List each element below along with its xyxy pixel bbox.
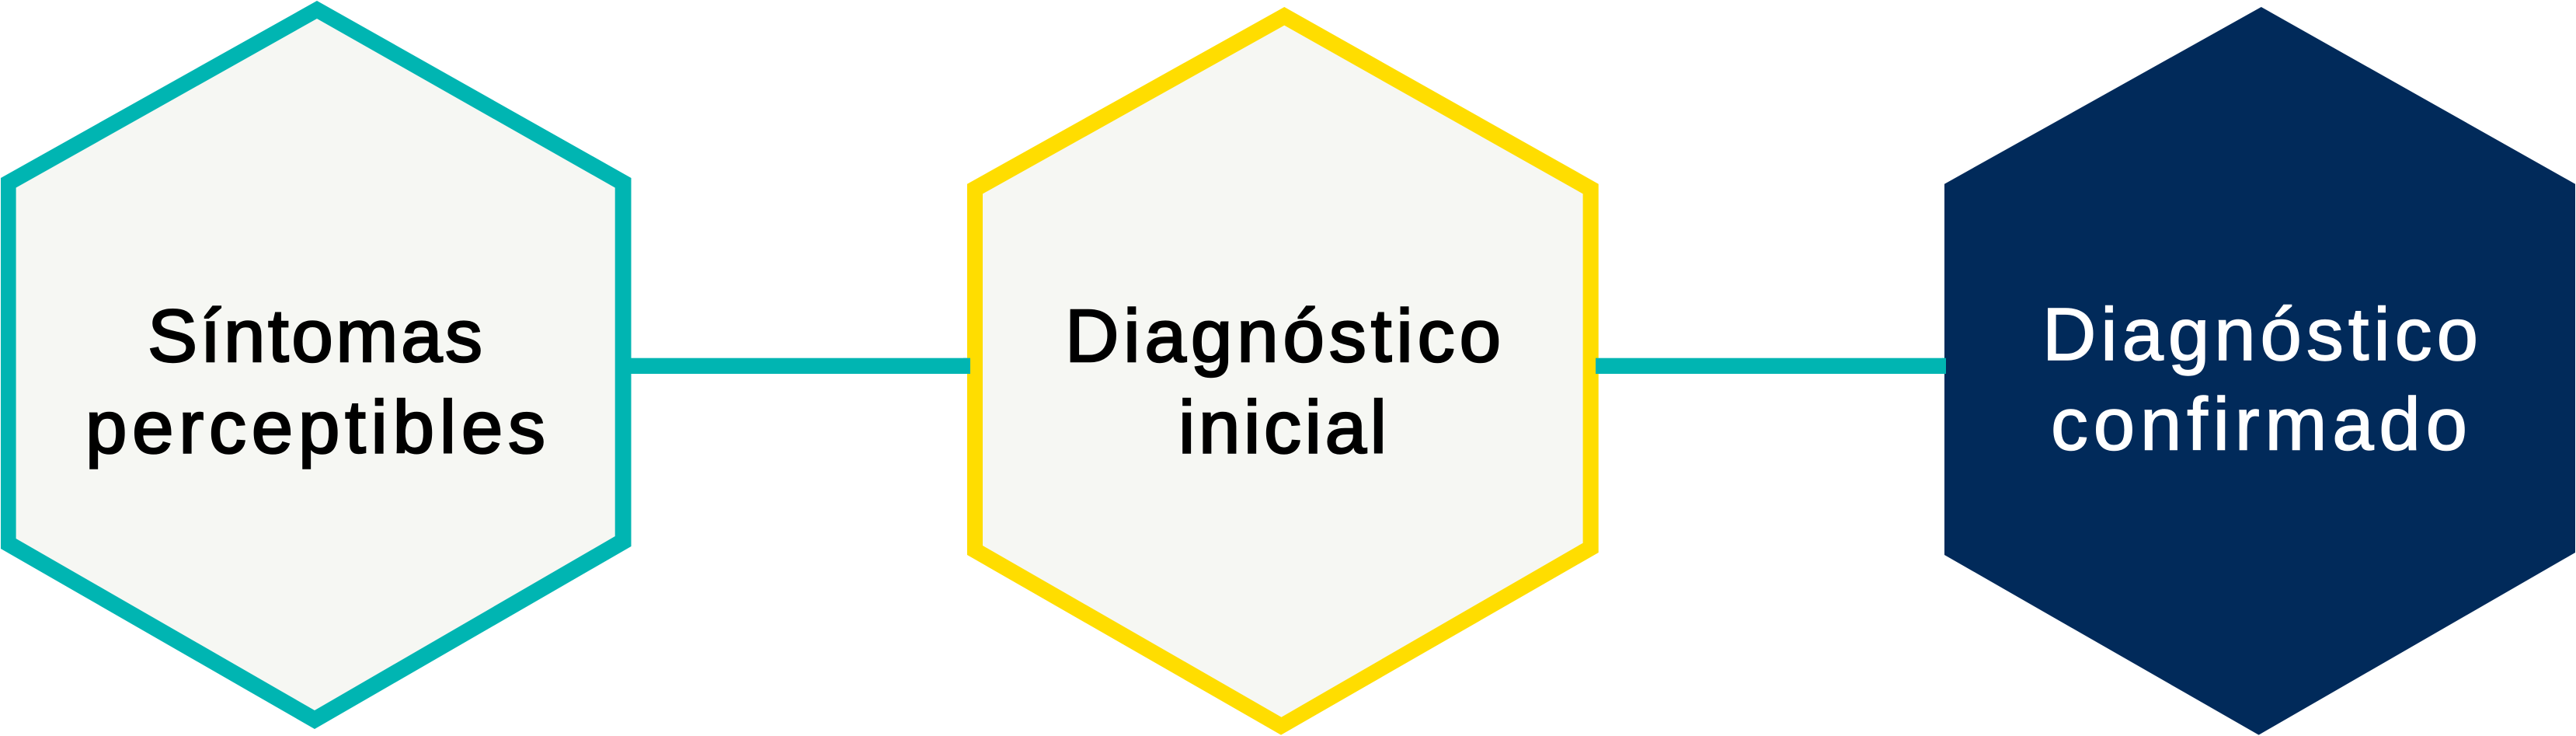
label: síntomas perceptibles: [85, 295, 545, 469]
hexagon: teal outline: [1, 1, 631, 729]
connector: first to second: [631, 358, 970, 374]
connector end over navy hexagon: [1942, 358, 1946, 374]
panel: diagnóstico confirmado: [1942, 7, 2575, 735]
connector: second to third: [1596, 358, 1946, 374]
connector: first-stage line end over yellow edge: [963, 358, 970, 374]
label: diagnóstico inicial: inicial: [1178, 386, 1387, 469]
label: diagnóstico confirmado: confirmado: [2051, 382, 2467, 466]
hexagon: light fill: [16, 19, 615, 710]
hexagon: yellow outline: [967, 7, 1599, 735]
label: síntomas perceptibles: Síntomas: [148, 295, 482, 378]
panel: síntomas perceptibles: [1, 1, 631, 729]
hexagon: light fill: [983, 26, 1583, 717]
label: síntomas perceptibles: perceptibles: [85, 386, 545, 469]
hexagon: navy fill: [1944, 7, 2575, 735]
label: diagnóstico inicial: [1065, 295, 1501, 469]
panel: diagnóstico inicial: [967, 7, 1599, 735]
label: diagnóstico inicial: Diagnóstico: [1065, 295, 1501, 378]
label: diagnóstico confirmado: Diagnóstico: [2042, 293, 2478, 376]
label: diagnóstico confirmado: [2042, 293, 2478, 466]
